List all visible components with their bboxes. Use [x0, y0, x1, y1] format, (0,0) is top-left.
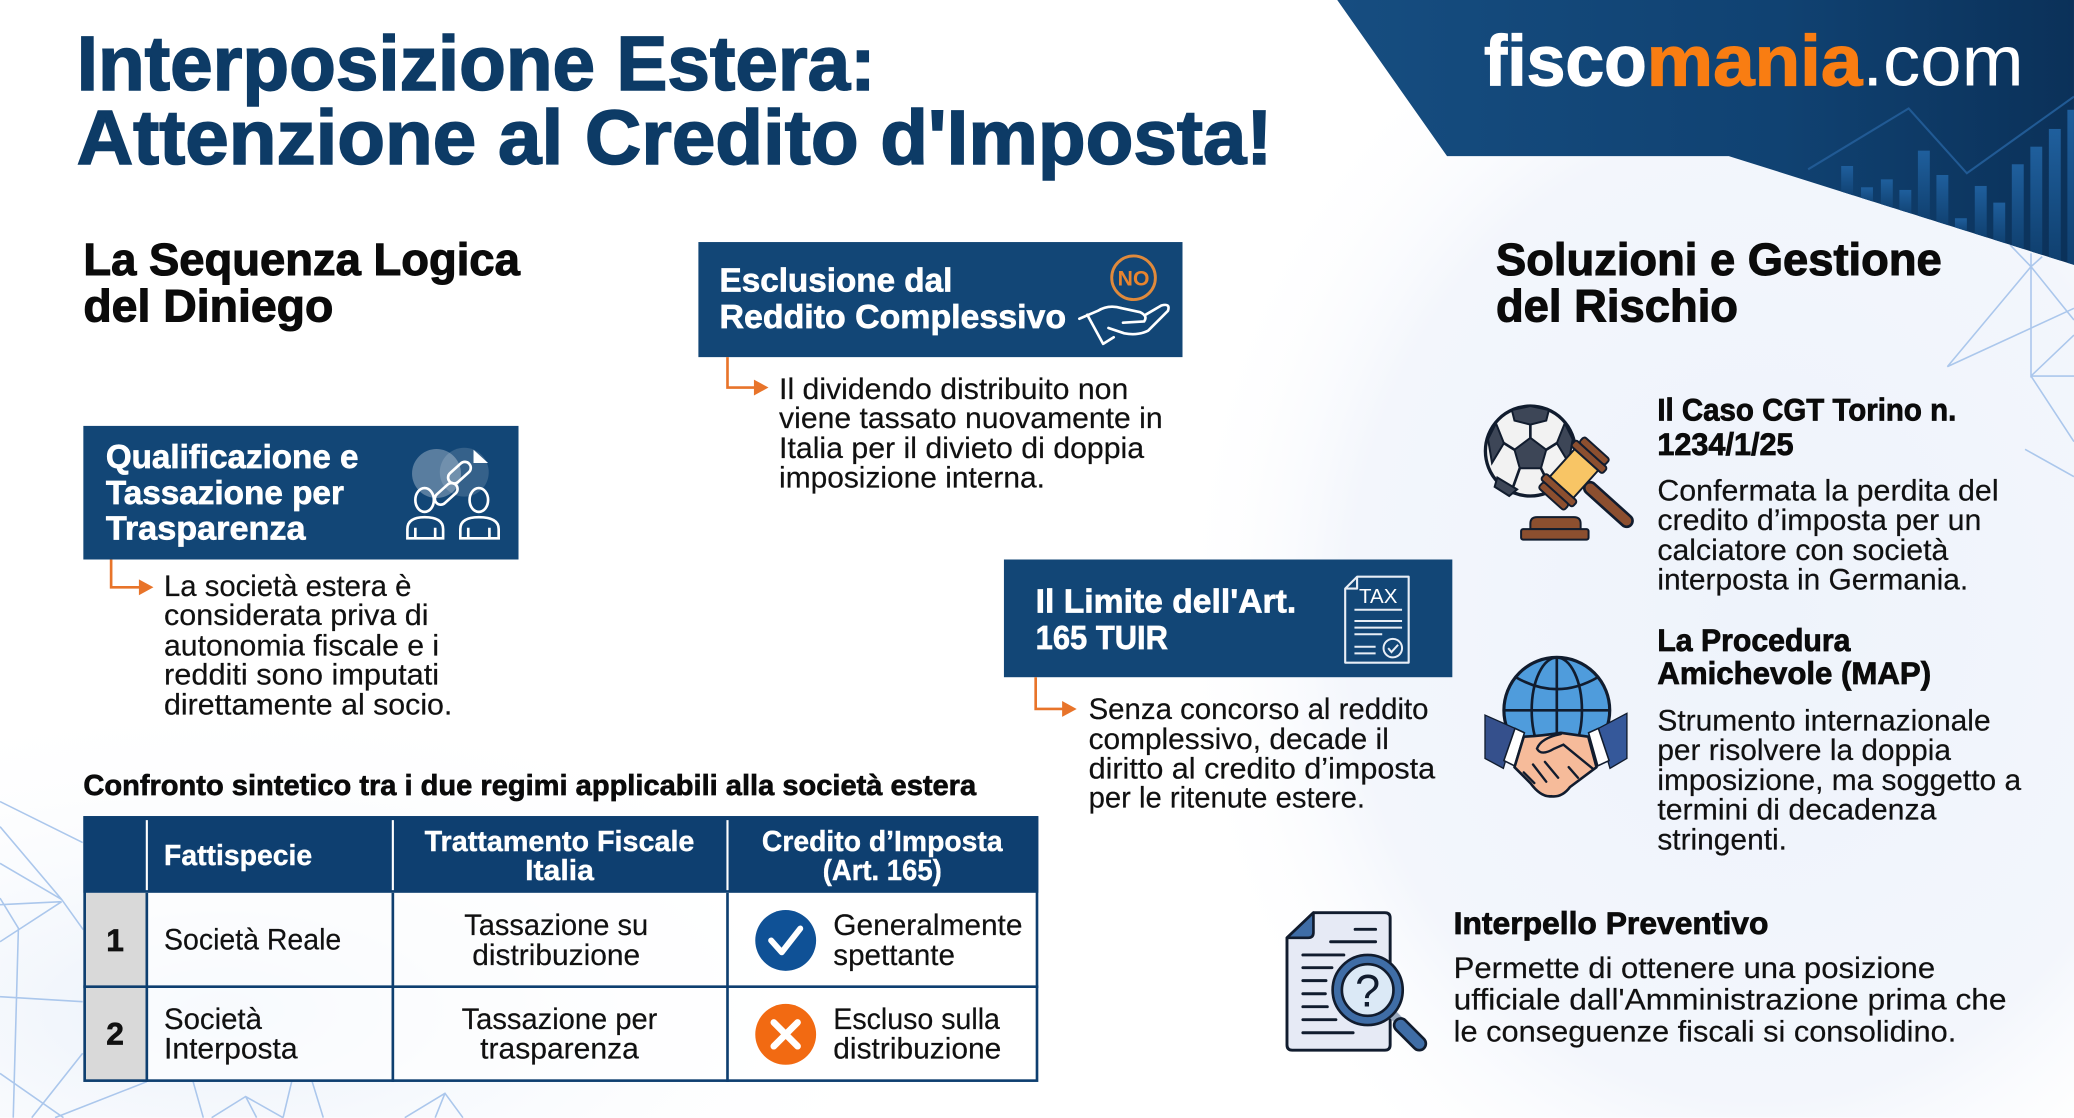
description — [164, 570, 452, 721]
heading: Soluzioni e Gestione del Rischio: del Rischio — [1496, 280, 1738, 331]
logo: fiscomania.com — [1484, 21, 2024, 101]
description: imposizione interna. — [779, 461, 1045, 494]
table header labels: (Art. 165) — [823, 855, 942, 887]
table header labels: Fattispecie — [164, 840, 312, 872]
description: Senza concorso al reddito — [1089, 693, 1429, 726]
description: diritto al credito d’imposta — [1089, 753, 1436, 786]
icon: tax document — [1345, 577, 1409, 663]
table header labels: Italia — [525, 855, 595, 887]
decorative network: bottom left — [0, 802, 463, 1118]
logo: fiscomania.com: .com — [1862, 21, 2024, 101]
panel: qualificazione e tassazione: Qualificazione e — [106, 439, 358, 476]
heading: La Sequenza Logica del Diniego: del Diniego — [83, 280, 333, 331]
description: direttamente al socio. — [164, 688, 452, 721]
table heading: Confronto sintetico tra i due regimi applicabili alla società estera — [83, 770, 977, 802]
panel: qualificazione e tassazione — [83, 426, 519, 721]
panel: limite art. 165 TUIR: 165 TUIR — [1036, 620, 1168, 657]
description: La società estera è — [164, 570, 411, 603]
text block: Procedura Amichevole — [1657, 622, 2022, 857]
panel: esclusione dal reddito complessivo: Reddito Complessivo — [720, 299, 1066, 336]
text block: Procedura Amichevole: stringenti. — [1657, 824, 1787, 857]
table row 2: Escluso sulla — [833, 1003, 1000, 1036]
text block: Interpello Preventivo: Permette di ottenere una posizione — [1454, 952, 1935, 985]
description: autonomia fiscale e i — [164, 629, 439, 662]
heading: La Sequenza Logica del Diniego — [83, 234, 521, 331]
logo: fiscomania.com: mania — [1647, 21, 1864, 101]
table row 1: spettante — [833, 939, 955, 972]
heading: Soluzioni e Gestione del Rischio: Soluzioni e Gestione — [1496, 234, 1942, 285]
description — [1089, 693, 1436, 815]
panel: esclusione dal reddito complessivo — [698, 242, 1182, 494]
logo: fiscomania.com: fisco — [1484, 21, 1647, 101]
table row 1 — [106, 909, 1022, 972]
text block: Interpello Preventivo — [1454, 905, 2007, 1048]
text block: Il Caso CGT Torino: calciatore con società — [1657, 534, 1949, 567]
panel: limite art. 165 TUIR: Il Limite dell'Art. — [1036, 583, 1296, 620]
icon: no in hand — [1079, 256, 1169, 344]
panel: qualificazione e tassazione: Tassazione per — [106, 475, 344, 512]
description — [779, 373, 1163, 494]
icon: no in hand: NO — [1118, 268, 1149, 291]
comparison table — [83, 816, 1038, 1082]
icon: linked people — [407, 448, 499, 538]
text block: Procedura Amichevole: imposizione, ma soggetto a — [1657, 764, 2022, 797]
description: considerata priva di — [164, 599, 429, 632]
description: redditi sono imputati — [164, 658, 439, 691]
table row 1: Tassazione su — [464, 909, 648, 942]
icon: cross — [755, 1004, 816, 1065]
table row 2: Tassazione per — [462, 1003, 658, 1036]
title: Attenzione al Credito d'Imposta! — [77, 96, 1272, 181]
heading: La Sequenza Logica del Diniego: La Sequenza Logica — [83, 234, 521, 285]
table header labels: Trattamento Fiscale — [425, 826, 694, 858]
icon: football and gavel — [1485, 406, 1654, 550]
text block: Il Caso CGT Torino: interposta in Germania. — [1657, 563, 1968, 596]
table row 2: distribuzione — [833, 1033, 1001, 1066]
table row 2 — [106, 1003, 1001, 1066]
table row 1: Società Reale — [164, 924, 341, 957]
table row 1: distribuzione — [472, 939, 640, 972]
text block: Procedura Amichevole: La Procedura — [1657, 622, 1851, 658]
text block: Procedura Amichevole: termini di decadenza — [1657, 794, 1937, 827]
text block: Interpello Preventivo: le conseguenze fiscali si consolidino. — [1454, 1015, 1956, 1048]
text block: Il Caso CGT Torino: Confermata la perdita del — [1657, 475, 1999, 508]
text block: Il Caso CGT Torino — [1657, 392, 1999, 596]
description: per le ritenute estere. — [1089, 782, 1365, 815]
heading: Soluzioni e Gestione del Rischio — [1496, 234, 1942, 331]
text block: Il Caso CGT Torino: 1234/1/25 — [1657, 426, 1794, 462]
icon: tax document: TAX — [1359, 585, 1398, 608]
title — [77, 22, 1272, 181]
text block: Procedura Amichevole: per risolvere la doppia — [1657, 734, 1952, 767]
table row 2: Interposta — [164, 1033, 298, 1066]
text block: Interpello Preventivo: Interpello Preventivo — [1454, 905, 1768, 941]
text block: Procedura Amichevole: Amichevole (MAP) — [1657, 655, 1931, 691]
arrow — [111, 559, 153, 595]
table header labels: Credito d’Imposta — [762, 826, 1003, 858]
header banner — [1337, 0, 2074, 269]
icon: document with magnifier — [1287, 913, 1419, 1050]
icon: check — [755, 910, 816, 971]
arrow — [1036, 677, 1077, 717]
text block: Procedura Amichevole: Strumento internazionale — [1657, 705, 1991, 738]
arrow — [727, 357, 768, 395]
table row 1: Generalmente — [833, 909, 1022, 942]
decorative network: right — [1947, 245, 2074, 477]
description: Italia per il divieto di doppia — [779, 432, 1145, 465]
text block: Interpello Preventivo: ufficiale dall'Amministrazione prima che — [1454, 984, 2007, 1017]
icon: document with magnifier: ? — [1355, 966, 1380, 1017]
table row 2: Società — [164, 1003, 262, 1036]
icon: globe and handshake — [1485, 657, 1627, 796]
text block: Il Caso CGT Torino: Il Caso CGT Torino n. — [1657, 392, 1956, 428]
table header labels — [164, 826, 1003, 887]
panel: limite art. 165 TUIR — [1004, 559, 1452, 815]
table row 1: 1 — [106, 922, 124, 958]
description: Il dividendo distribuito non — [779, 373, 1128, 406]
panel: qualificazione e tassazione: Trasparenza — [106, 511, 306, 548]
panel: esclusione dal reddito complessivo: Esclusione dal — [720, 262, 952, 299]
table row 2: 2 — [106, 1015, 124, 1051]
title: Interposizione Estera: — [77, 22, 876, 107]
description: viene tassato nuovamente in — [779, 402, 1163, 435]
table row 2: trasparenza — [480, 1033, 639, 1066]
text block: Il Caso CGT Torino: credito d’imposta per un — [1657, 504, 1981, 537]
mini chart — [1808, 97, 2074, 269]
description: complessivo, decade il — [1089, 723, 1389, 756]
